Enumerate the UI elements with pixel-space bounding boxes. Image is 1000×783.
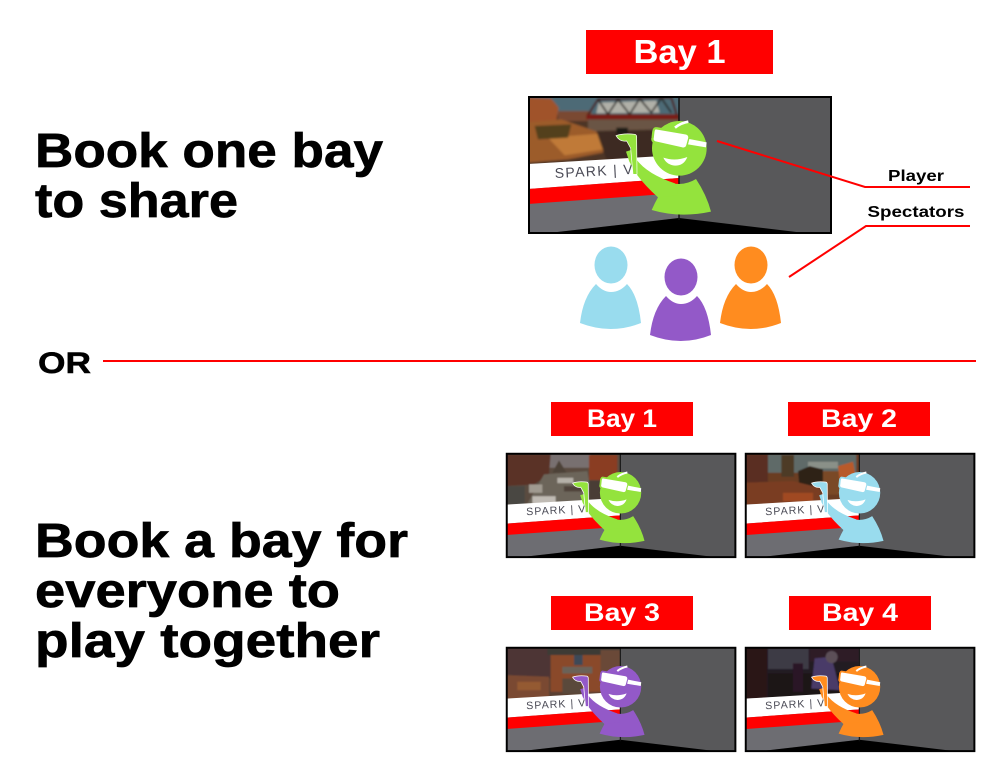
bay scene: bay 3 purple player: SPARK | V — [526, 697, 586, 712]
label: Bay 4: Bay 4 — [822, 599, 898, 627]
callout lines — [717, 141, 970, 277]
player figure — [573, 666, 645, 737]
player figure — [573, 472, 645, 543]
spectator: purple — [650, 258, 711, 341]
spectator: orange — [720, 246, 781, 329]
heading: book a bay for everyone — [35, 515, 408, 668]
bay scene: bay 1 green player — [504, 451, 736, 558]
label: Bay 2 — [788, 402, 930, 436]
label: Bay 1 small — [551, 402, 693, 436]
label: Bay 1 main — [586, 30, 773, 74]
bay scene: main with green player: SPARK | V — [554, 161, 634, 181]
heading: book one bay: to share — [35, 175, 238, 228]
bay scene: bay 4 orange player: SPARK | V — [765, 697, 825, 712]
label: Bay 3: Bay 3 — [584, 599, 660, 627]
bay scene: bay 4 orange player — [743, 645, 975, 752]
label: Bay 1 small: Bay 1 — [587, 405, 657, 433]
label: Spectators: Spectators — [868, 204, 965, 221]
bay scene: bay 3 purple player — [504, 645, 736, 752]
spectator: blue — [580, 246, 641, 329]
bay scene: main with green player — [526, 94, 832, 234]
heading: book one bay: Book one bay — [35, 125, 383, 178]
heading: book a bay for everyone: play together — [35, 615, 380, 668]
heading: book one bay — [35, 125, 383, 228]
heading: book a bay for everyone: everyone to — [35, 565, 340, 618]
player figure — [616, 121, 711, 215]
label: Bay 2: Bay 2 — [821, 405, 897, 433]
label: Bay 1 main: Bay 1 — [634, 33, 726, 70]
label: Bay 4 — [789, 596, 931, 630]
player figure — [812, 472, 884, 543]
OR divider: OR — [38, 347, 91, 380]
bay scene: bay 2 blue player: SPARK | V — [765, 503, 825, 518]
heading: book a bay for everyone: Book a bay for — [35, 515, 408, 568]
player figure — [812, 666, 884, 737]
bay scene: bay 1 green player: SPARK | V — [526, 503, 586, 518]
bay scene: bay 2 blue player — [743, 451, 975, 558]
label: Player: Player — [888, 168, 944, 185]
label: Bay 3 — [551, 596, 693, 630]
